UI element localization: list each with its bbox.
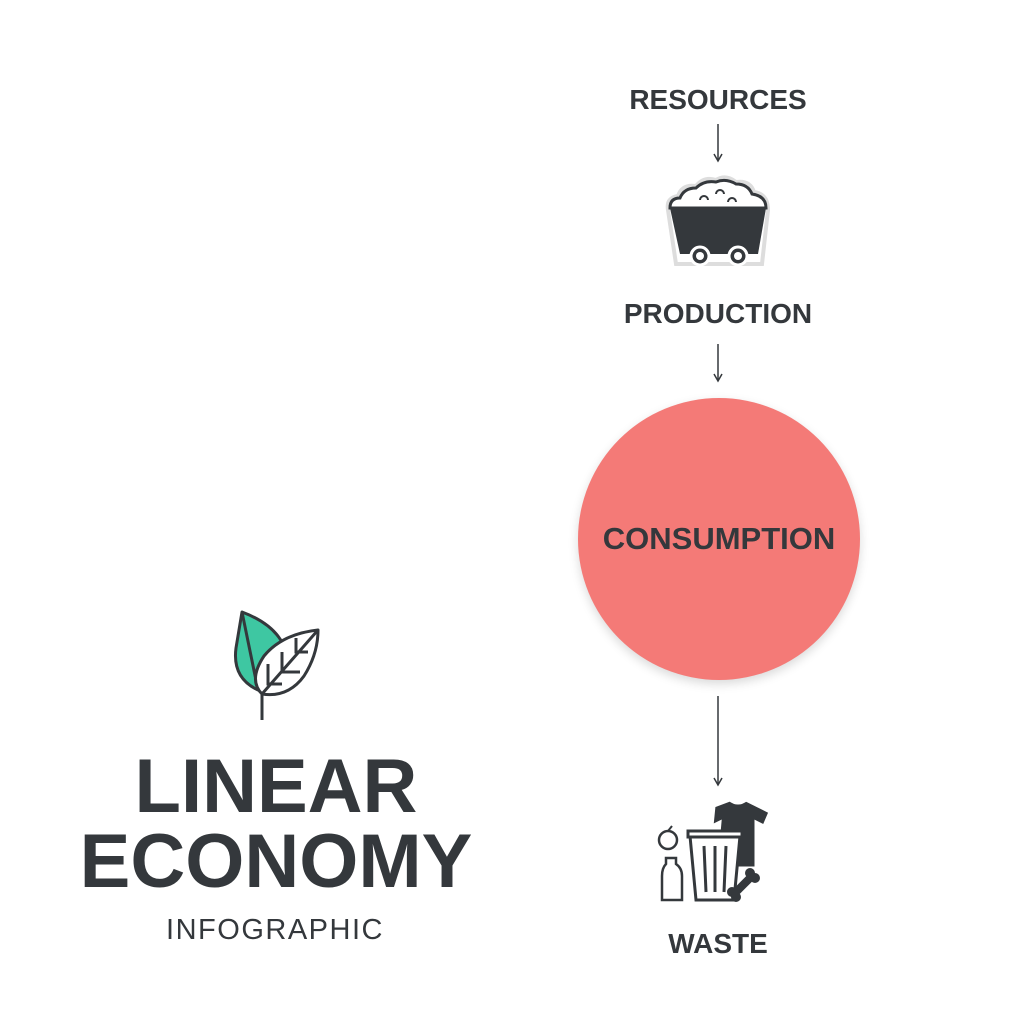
- arrow: consumption to waste: [713, 696, 723, 786]
- title: linear economy: ECONOMY: [80, 819, 472, 904]
- circle: consumption: [578, 398, 860, 680]
- icon: mine cart: [666, 176, 770, 266]
- title: linear economy: [80, 744, 472, 904]
- arrow: production to consumption: [713, 344, 723, 382]
- heading: waste: WASTE: [668, 928, 768, 959]
- label: consumption: CONSUMPTION: [603, 521, 835, 556]
- heading: resources: RESOURCES: [629, 84, 807, 115]
- icon: leaves: [234, 610, 320, 720]
- subtitle: infographic: INFOGRAPHIC: [166, 914, 384, 946]
- heading: production: PRODUCTION: [624, 298, 812, 329]
- arrow: resources to cart: [713, 124, 723, 162]
- title: linear economy: LINEAR: [135, 744, 417, 829]
- icon: waste pile: [658, 802, 768, 902]
